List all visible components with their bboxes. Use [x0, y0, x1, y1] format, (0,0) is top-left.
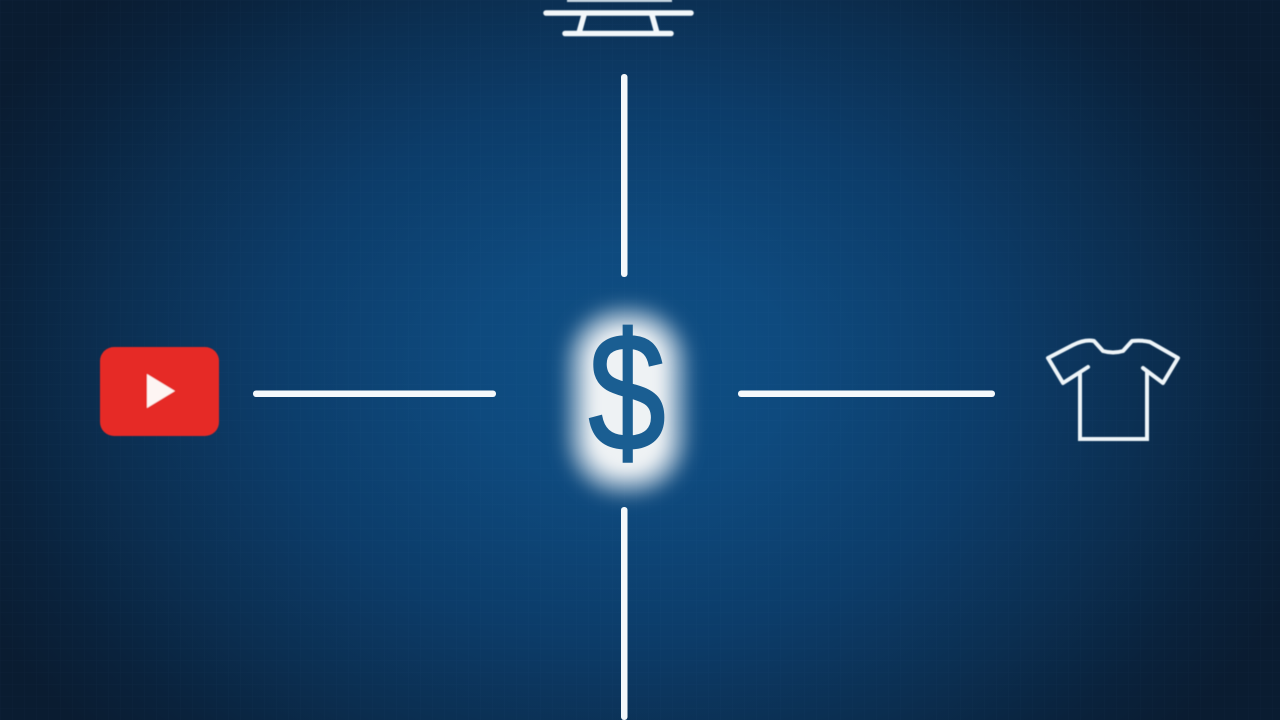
icon: t-shirt [1048, 340, 1178, 439]
connector line: right [738, 390, 995, 397]
icon: video play button [100, 347, 219, 436]
connector line: top [621, 74, 628, 277]
icon: glowing dollar sign [572, 298, 682, 490]
connector line: left [253, 390, 496, 397]
connector line: bottom [621, 507, 628, 720]
icon: computer monitor [546, 0, 691, 34]
icon: glowing dollar sign: $ [588, 298, 666, 486]
